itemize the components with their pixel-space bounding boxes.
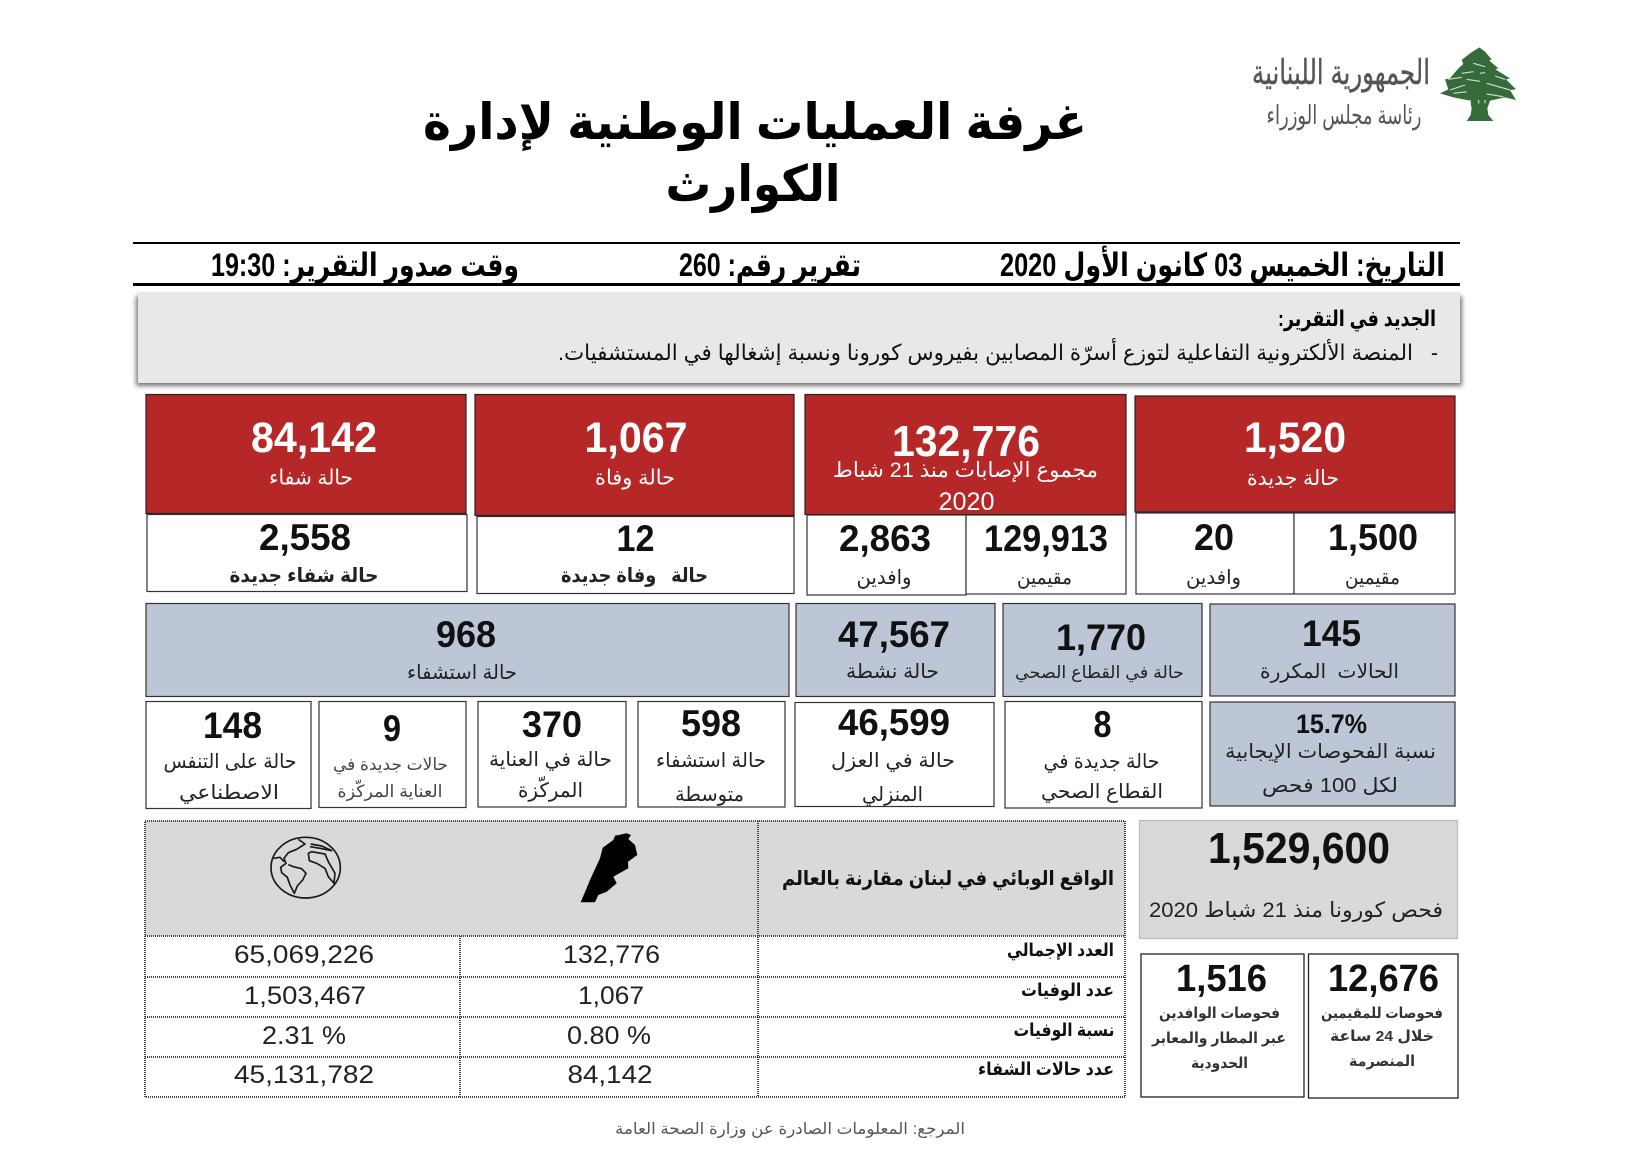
- label: new cases: حالة جديدة: [1247, 467, 1339, 490]
- row: total cases: العدد الإجمالي: [1007, 940, 1114, 961]
- number: residents: 129,913: [984, 518, 1108, 559]
- row: death rate: 0.80 %: [567, 1022, 651, 1050]
- heading: new in report: الجديد في التقرير:: [1278, 306, 1436, 332]
- report info bar: [133, 242, 1460, 286]
- number: total cases: 132,776: [892, 417, 1040, 466]
- label: arrivals: وافدين: [856, 567, 912, 589]
- number: hospitalised: 968: [436, 614, 496, 655]
- row: death rate: 2.31 %: [262, 1022, 346, 1050]
- number: home isolation: 46,599: [838, 702, 950, 743]
- label: active: حالة نشطة: [846, 661, 939, 683]
- logo: Lebanese Republic cedar and calligraphy: [1252, 47, 1516, 131]
- panel: ICU: المركّزة: [518, 776, 583, 802]
- number: resident tests: 12,676: [1328, 958, 1439, 1000]
- panel: total cases: [805, 394, 1126, 595]
- panel: recoveries: [146, 394, 467, 592]
- number: new residents: 1,500: [1328, 517, 1418, 558]
- row: deaths: [244, 980, 1114, 1010]
- number: new arrivals: 20: [1194, 517, 1234, 558]
- panel: ventilated: [146, 702, 311, 808]
- panel: new health sector: [1005, 702, 1202, 808]
- panel: moderate hospitalised: متوسطة: [675, 784, 744, 806]
- row: death rate: [262, 1020, 1114, 1050]
- number: arrivals: 2,863: [839, 518, 931, 559]
- row: recoveries: عدد حالات الشفاء: [978, 1059, 1114, 1079]
- number: total tests: 1,529,600: [1208, 824, 1390, 873]
- text: new item: - المنصة الألكترونية التفاعلية لتوزع أسرّة المصابين بفيروس كورونا ونسبة إشغالها في المستشفيات.: [558, 338, 1438, 366]
- source note: المرجع: المعلومات الصادرة عن وزارة الصحة العامة: [615, 1121, 965, 1139]
- number: health sector: 1,770: [1056, 617, 1146, 658]
- panel: moderate hospitalised: [638, 702, 785, 807]
- panel: deaths: [475, 394, 794, 594]
- number: active: 47,567: [838, 614, 950, 655]
- label: total cases since date: مجموع الإصابات منذ 21 شباط: [833, 459, 1098, 482]
- label: arrival tests: فحوصات الوافدين: [1159, 1005, 1280, 1022]
- logo text: republic name: الجمهورية اللبنانية: [1252, 54, 1430, 93]
- report number: تقرير رقم: 260: [679, 247, 861, 284]
- row: deaths: 1,067: [578, 982, 644, 1010]
- panel: home isolation: المنزلي: [862, 784, 923, 807]
- panel: hospitalised: [146, 604, 789, 696]
- number: positivity: 15.7%: [1296, 709, 1367, 739]
- panel: comparison table: [145, 821, 1125, 1097]
- panel: arrival tests: الحدودية: [1191, 1055, 1248, 1072]
- panel: new in the report: [136, 292, 1462, 386]
- report time: وقت صدور التقرير: 19:30: [211, 247, 519, 284]
- panel: ICU: [478, 702, 626, 807]
- report date: التاريخ: الخميس 03 كانون الأول 2020: [1000, 245, 1445, 284]
- label: hospitalised: حالة استشفاء: [407, 662, 517, 684]
- number: new recoveries: 2,558: [259, 517, 351, 558]
- title: غرفة العمليات الوطنية لإدارة: [423, 94, 1087, 152]
- label: year: 2020: [938, 488, 994, 516]
- panel: resident tests: خلال 24 ساعة: [1330, 1028, 1434, 1045]
- number: ICU: 370: [522, 704, 582, 745]
- row: deaths: عدد الوفيات: [1021, 980, 1114, 1001]
- label: moderate: حالة استشفاء: [656, 750, 766, 772]
- label: positivity: نسبة الفحوصات الإيجابية: [1225, 741, 1436, 763]
- label: new residents: مقيمين: [1345, 567, 1400, 589]
- title: الكوارث: [666, 156, 840, 214]
- logo text: presidency of council: رئاسة مجلس الوزراء: [1266, 100, 1422, 131]
- label: new arrivals: وافدين: [1186, 567, 1241, 589]
- heading: comparison: الواقع الوبائي في لبنان مقارنة بالعالم: [782, 868, 1114, 891]
- panel: active cases: [796, 604, 995, 696]
- number: total deaths: 1,067: [584, 414, 688, 462]
- row: total cases: [234, 940, 1114, 969]
- label: health sector: حالة في القطاع الصحي: [1015, 663, 1184, 683]
- number: ventilated: 148: [203, 705, 262, 746]
- label: resident tests: فحوصات للمقيمين: [1321, 1005, 1443, 1022]
- number: new ICU: 9: [383, 708, 401, 749]
- row: deaths: 1,503,467: [244, 982, 366, 1010]
- panel: new health sector: القطاع الصحي: [1041, 781, 1163, 804]
- label: deaths: حالة وفاة: [595, 466, 675, 490]
- panel: resident tests: المنصرمة: [1349, 1053, 1415, 1070]
- title: [423, 94, 1087, 214]
- number: arrival tests: 1,516: [1176, 958, 1267, 1000]
- panel: new ICU: [319, 702, 466, 808]
- label: new deaths: حالة وفاة جديدة: [561, 565, 708, 587]
- row: death rate: نسبة الوفيات: [1014, 1020, 1114, 1041]
- label: recoveries: حالة شفاء: [269, 466, 353, 490]
- row: recoveries: [234, 1059, 1114, 1089]
- label: residents: مقيمين: [1017, 567, 1072, 589]
- label: new ICU: حالات جديدة في: [333, 755, 448, 775]
- panel: health sector cases: [1003, 604, 1202, 696]
- number: new health sector: 8: [1094, 704, 1112, 745]
- label: ICU: حالة في العناية: [489, 749, 612, 772]
- row: total cases: 132,776: [563, 941, 660, 969]
- panel: arrival tests: [1141, 954, 1304, 1097]
- icon: Lebanon map: [581, 833, 637, 902]
- label: repeated: الحالات المكررة: [1260, 661, 1399, 683]
- number: moderate: 598: [681, 703, 741, 744]
- row: total cases: 65,069,226: [234, 941, 374, 969]
- icon: cedar tree: [1440, 47, 1516, 121]
- row: recoveries: 84,142: [568, 1061, 652, 1089]
- panel: new cases: [1135, 396, 1455, 594]
- panel: arrival tests: عبر المطار والمعابر: [1151, 1030, 1286, 1047]
- panel: positivity rate: [1210, 702, 1455, 806]
- panel: ventilated: الاصطناعي: [179, 782, 279, 805]
- panel: home isolation: [795, 702, 994, 807]
- label: new recoveries: حالة شفاء جديدة: [230, 565, 378, 587]
- label: new health sector: حالة جديدة في: [1044, 751, 1160, 774]
- panel: repeated cases: [1210, 604, 1455, 696]
- panel: positivity rate: لكل 100 فحص: [1262, 775, 1398, 797]
- row: recoveries: 45,131,782: [234, 1061, 374, 1089]
- panel: new ICU: العناية المركّزة: [338, 779, 442, 801]
- icon: globe: [271, 837, 340, 898]
- number: new deaths: 12: [616, 518, 654, 559]
- label: total tests: فحص كورونا منذ 21 شباط 2020: [1149, 899, 1443, 922]
- number: total recoveries: 84,142: [251, 414, 377, 462]
- label: home isolation: حالة في العزل: [831, 750, 955, 773]
- panel: total tests: [1140, 820, 1458, 938]
- panel: resident tests: [1308, 954, 1458, 1098]
- number: new cases: 1,520: [1244, 414, 1346, 462]
- label: ventilated: حالة على التنفس: [164, 751, 296, 773]
- number: repeated: 145: [1302, 613, 1361, 654]
